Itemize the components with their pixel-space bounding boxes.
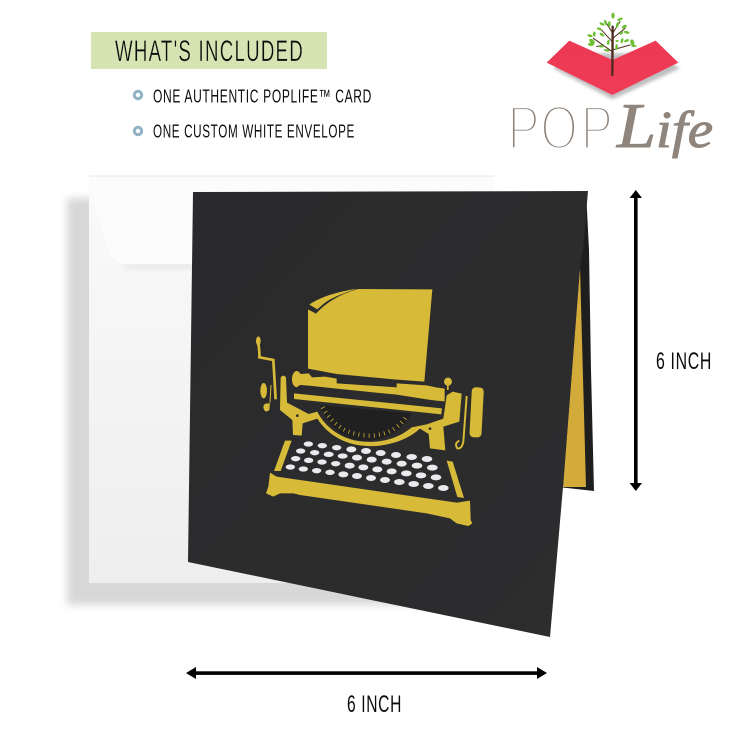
envelope shadow (67, 198, 430, 605)
heading: what's included: WHAT'S INCLUDED (115, 35, 304, 68)
pop-up card (188, 191, 594, 637)
text: card item: ONE AUTHENTIC POPLIFE™ CARD (153, 86, 372, 106)
card back panel (558, 191, 594, 491)
envelope flap (90, 177, 493, 264)
logo wordmark: Life: Life (616, 90, 713, 161)
dial ticks (323, 407, 407, 436)
paper (309, 289, 357, 309)
label: vertical 6 inch: 6 INCH (656, 348, 712, 375)
bar (294, 393, 442, 414)
keys (286, 441, 449, 491)
keyboard brackets (274, 441, 292, 471)
knob right (469, 387, 484, 438)
list: included items (134, 86, 372, 142)
crank left (258, 338, 276, 399)
envelope body (89, 176, 494, 583)
base (266, 473, 472, 526)
card gold inner edge (563, 267, 586, 487)
envelope (67, 176, 494, 605)
label: horizontal 6 inch: 6 INCH (347, 691, 402, 718)
text: envelope item: ONE CUSTOM WHITE ENVELOPE (153, 120, 355, 142)
typewriter cut-out (256, 289, 484, 526)
logo: PopLife (508, 13, 713, 162)
logo wordmark: POP: POP (508, 93, 613, 162)
dial shadow (320, 405, 412, 441)
roller (292, 371, 445, 401)
logo: open book icon with tree (547, 13, 680, 99)
bullet: envelope item (134, 127, 142, 135)
card front panel (188, 191, 588, 637)
arrow: horizontal dimension (186, 667, 547, 679)
envelope flap shadow (125, 263, 215, 269)
bullet: card item (134, 91, 142, 99)
heading: what's included (91, 32, 327, 69)
frame and carriage arc (280, 376, 462, 450)
arrow: vertical dimension (630, 190, 642, 491)
